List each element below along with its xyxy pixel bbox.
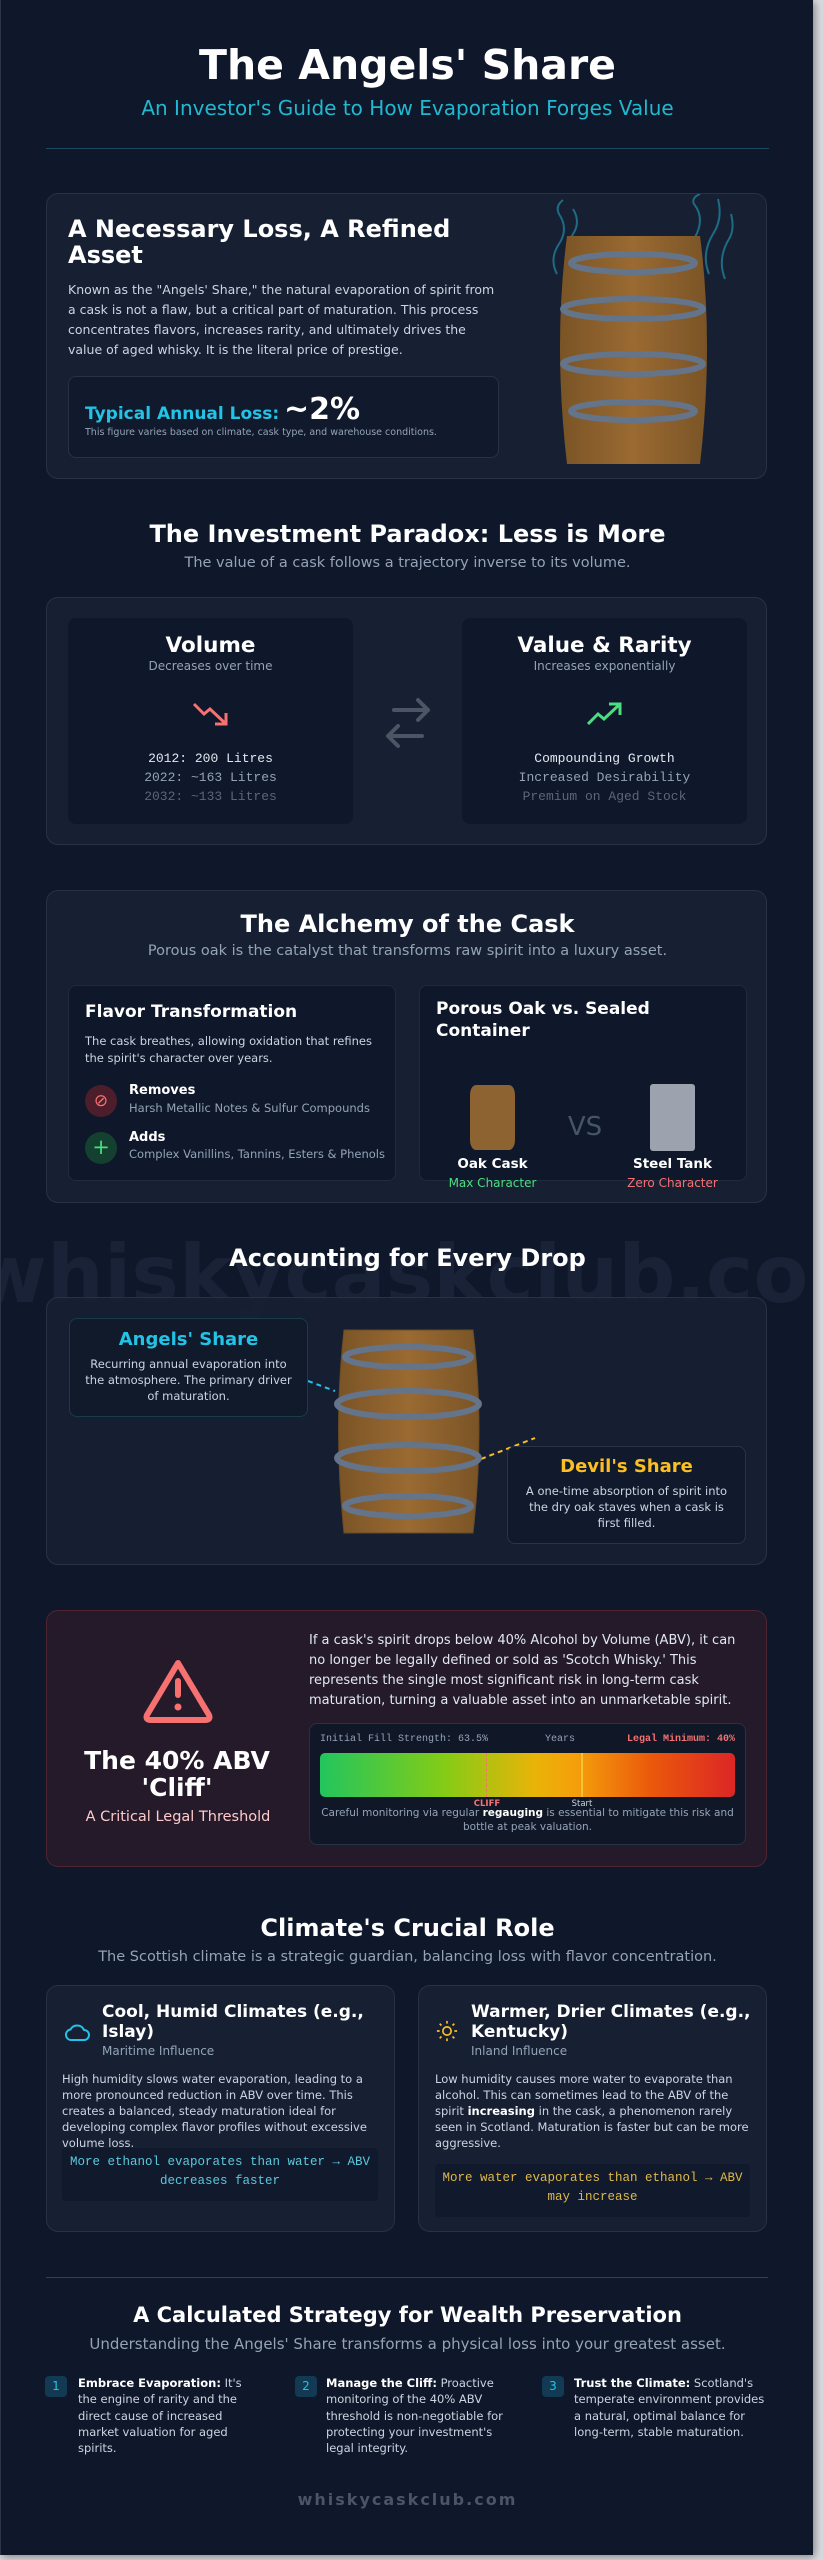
- icon: steel tank: [650, 1084, 695, 1151]
- heading: A Necessary Loss, A Refined Asset: [68, 215, 450, 269]
- card: value & rarity: Compounding Growth: [534, 751, 675, 766]
- subtitle: The value of a cask follows a trajectory inverse to its volume.: [184, 555, 630, 571]
- card: oak vs steel: Porous Oak vs. Sealed Container: [436, 999, 650, 1041]
- card: volume: 2012: 200 Litres: [148, 751, 273, 766]
- chart: ABV gradient bar: Years: [545, 1734, 575, 1745]
- panel: cool humid climates: Maritime Influence: [102, 2044, 214, 2058]
- chart: ABV gradient bar: Start: [572, 1799, 592, 1809]
- callout: angels' share: Angels' Share: [119, 1329, 258, 1350]
- card: volume: Volume: [166, 633, 255, 658]
- card: flavor transformation: The cask breathes, allowing oxidation that refines the spirit's character over years.: [85, 1034, 372, 1064]
- callout: devil's share: [507, 1446, 746, 1544]
- icon: barrel with vapour: [552, 194, 734, 464]
- icon: trend up: [587, 702, 622, 725]
- subtitle: Understanding the Angels' Share transforms a physical loss into your greatest asset.: [89, 2335, 726, 2353]
- callout: angels' share: Recurring annual evaporation into the atmosphere. The primary driver of maturation.: [85, 1357, 292, 1403]
- heading: The 40% ABV 'Cliff': [84, 1746, 270, 1802]
- icon: trend down: [193, 703, 228, 726]
- card: oak vs steel: [419, 985, 747, 1181]
- panel: alchemy of the cask: Zero Character: [627, 1176, 718, 1190]
- callout: typical annual loss: ~2%: [284, 392, 360, 427]
- panel: alchemy of the cask: [46, 890, 767, 1203]
- panel: necessary loss: [46, 193, 767, 479]
- icon: removes: ⊘: [94, 1091, 108, 1111]
- barrel and connectors: [308, 1330, 536, 1534]
- panel: cool humid climates: Cool, Humid Climates (e.g., Islay): [102, 2002, 364, 2042]
- chart: ABV gradient bar: Legal Minimum: 40%: [627, 1734, 735, 1745]
- callout: More ethanol evaporates than water → ABV decreases faster: [70, 2155, 370, 2188]
- step 3: 3: [549, 2379, 557, 2393]
- panel: warmer drier climates: Low humidity causes more water to evaporate than alcohol. This can sometimes lead to the ABV of the spirit increasing in the cask, a phenomenon rarely seen in Scotland. Maturation is faster but can be more aggressive.: [435, 2072, 749, 2150]
- icon: exchange arrows: [386, 698, 430, 748]
- callout: typical annual loss: This figure varies based on climate, cask type, and warehouse conditions.: [85, 427, 437, 438]
- chart: ABV gradient bar: [309, 1723, 746, 1845]
- card: oak vs steel: VS: [568, 1112, 602, 1142]
- icon: sun: [436, 2020, 458, 2042]
- card: volume: 2022: ~163 Litres: [144, 770, 277, 785]
- icon: adds: +: [92, 1135, 110, 1159]
- card: volume: Decreases over time: [148, 659, 272, 673]
- card: flavor transformation: Harsh Metallic Notes & Sulfur Compounds: [129, 1101, 370, 1115]
- callout: More water evaporates than ethanol → ABV may increase: [442, 2171, 743, 2204]
- subtitle: The Scottish climate is a strategic guardian, balancing loss with flavor concentration.: [98, 1949, 717, 1965]
- callout: typical annual loss: [68, 376, 499, 458]
- heading: calculated strategy: A Calculated Strategy for Wealth Preservation: [133, 2303, 682, 2327]
- heading: climate's crucial role: Climate's Crucial Role: [260, 1914, 555, 1942]
- title: The Angels' Share: [199, 41, 616, 89]
- chart: ABV gradient bar: Careful monitoring via regular regauging is essential to mitigate this risk and bottle at peak valuation.: [321, 1807, 734, 1832]
- panel: alchemy of the cask: Max Character: [449, 1176, 536, 1190]
- callout: devil's share: A one-time absorption of spirit into the dry oak staves when a cask is first filled.: [526, 1484, 727, 1530]
- callout: devil's share: Devil's Share: [560, 1456, 693, 1477]
- callout: [435, 2164, 750, 2217]
- card: value & rarity: [462, 618, 747, 824]
- step 2: Manage the Cliff: Proactive monitoring of the 40% ABV threshold is non-negotiable for protecting your investment's legal integrity.: [326, 2376, 503, 2455]
- step 2: 2: [302, 2379, 310, 2393]
- card: value & rarity: Premium on Aged Stock: [523, 789, 686, 804]
- panel: warmer drier climates: [418, 1985, 767, 2232]
- card: flavor transformation: Adds: [129, 1130, 165, 1145]
- step 1: 1: [52, 2379, 60, 2393]
- callout: typical annual loss: Typical Annual Loss:: [85, 404, 279, 424]
- subtitle: An Investor's Guide to How Evaporation Forges Value: [141, 96, 674, 120]
- footer: whiskycaskclub.com: [298, 2490, 517, 2509]
- card: value & rarity: Increased Desirability: [519, 770, 690, 785]
- heading: The Alchemy of the Cask: [240, 910, 575, 938]
- text block: If a cask's spirit drops below 40% Alcohol by Volume (ABV), it can no longer be legally defined or sold as 'Scotch Whisky.' This represents the single most significant risk in long-term cask maturation, turning a valuable asset into an unmarketable spirit.: [309, 1633, 735, 1708]
- step 3: Trust the Climate: Scotland's temperate environment provides a natural, optimal balance for long-term, stable maturation.: [574, 2376, 764, 2439]
- panel: 40% ABV cliff: A Critical Legal Threshold: [86, 1809, 270, 1825]
- step 1: Embrace Evaporation: It's the engine of rarity and the direct cause of increased market valuation for aged spirits.: [78, 2376, 242, 2455]
- text block: Known as the "Angels' Share," the natural evaporation of spirit from a cask is not a flaw, but a critical part of maturation. This process concentrates flavors, increases rarity, and ultimately drives the value of aged whisky. It is the literal price of prestige.: [68, 282, 494, 357]
- card: flavor transformation: Removes: [129, 1083, 195, 1098]
- panel: warmer drier climates: Inland Influence: [471, 2044, 567, 2058]
- icon: adds: [85, 1132, 117, 1164]
- card: value & rarity: Value & Rarity: [517, 633, 692, 658]
- subtitle: Porous oak is the catalyst that transforms raw spirit into a luxury asset.: [148, 943, 667, 959]
- heading: accounting for every drop: Accounting for Every Drop: [229, 1244, 586, 1272]
- panel: paradox: [46, 597, 767, 845]
- chart: ABV gradient bar: CLIFF: [474, 1799, 500, 1809]
- icon: oak cask: [470, 1085, 515, 1150]
- panel: accounting: [46, 1297, 767, 1565]
- icon: cloud: [65, 2024, 90, 2041]
- card: oak vs steel: Steel Tank: [633, 1156, 712, 1172]
- panel: 40% ABV cliff: [46, 1610, 767, 1867]
- icon: warning: [144, 1660, 212, 1723]
- panel: warmer drier climates: Warmer, Drier Climates (e.g., Kentucky): [471, 2002, 751, 2042]
- card: flavor transformation: [68, 985, 396, 1181]
- card: oak vs steel: Oak Cask: [457, 1156, 528, 1172]
- card: flavor transformation: Flavor Transformation: [85, 1002, 297, 1022]
- panel: cool humid climates: High humidity slows water evaporation, leading to a more pronounced reduction in ABV over time. This creates a balanced, steady maturation ideal for developing complex flavor profiles without excessive volume loss.: [62, 2072, 367, 2150]
- chart: ABV gradient bar: Initial Fill Strength: 63.5%: [320, 1734, 488, 1745]
- card: flavor transformation: Complex Vanillins, Tannins, Esters & Phenols: [129, 1147, 385, 1161]
- steps: [45, 2376, 764, 2455]
- callout: angels' share: [69, 1318, 308, 1417]
- callout: [62, 2148, 378, 2201]
- card: volume: [68, 618, 353, 824]
- card: volume: 2032: ~133 Litres: [144, 789, 277, 804]
- panel: cool humid climates: [46, 1985, 395, 2232]
- heading: investment paradox: The Investment Paradox: Less is More: [149, 520, 666, 548]
- card: value & rarity: Increases exponentially: [534, 659, 675, 673]
- icon: removes: [85, 1085, 117, 1117]
